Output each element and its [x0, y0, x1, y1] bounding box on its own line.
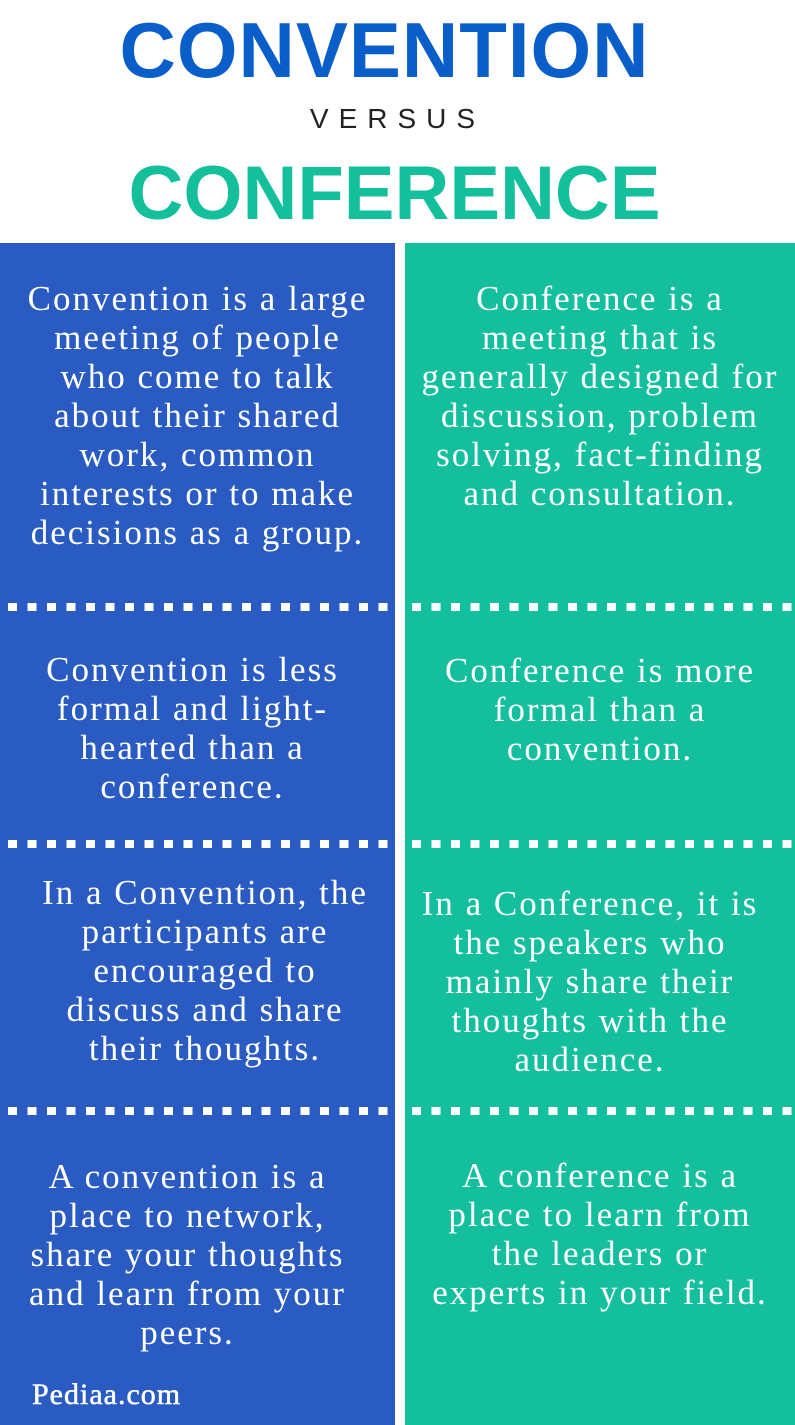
text: convention definition: work, common — [80, 435, 315, 474]
panel: conference column — [405, 243, 795, 1425]
text: convention participants: discuss and share — [66, 990, 344, 1029]
text: conference definition: and consultation. — [463, 474, 737, 513]
text: conference learning — [432, 1156, 768, 1312]
text: convention formality: formal than a — [494, 690, 706, 729]
text: convention participants: their thoughts. — [89, 1029, 321, 1068]
text: conference definition: meeting that is — [482, 318, 718, 357]
text: convention definition — [28, 279, 367, 552]
text: convention definition: Convention is a large — [28, 279, 367, 318]
logo: Pediaa.com: Pediaa.com — [32, 1378, 181, 1411]
text: conference definition: discussion, problem — [441, 396, 759, 435]
text: conference speakers: thoughts with the — [451, 1001, 729, 1040]
text: convention network — [29, 1157, 346, 1352]
text: convention definition: interests or to make — [40, 474, 355, 513]
text: conference learning: experts in your field. — [432, 1273, 768, 1312]
text: convention formality: formal and light- — [57, 689, 328, 728]
text: convention formality: Convention is less — [46, 650, 339, 689]
text: conference speakers — [422, 884, 758, 1079]
text: convention network: place to network, — [50, 1196, 326, 1235]
text: convention definition: meeting of people — [54, 318, 341, 357]
text: convention definition: decisions as a group. — [31, 513, 364, 552]
text: convention network: peers. — [140, 1313, 235, 1352]
title: convention: CONVENTION — [119, 6, 650, 94]
text: conference definition: Conference is a — [476, 279, 724, 318]
text: convention formality — [445, 651, 755, 768]
text: conference speakers: In a Conference, it is — [422, 884, 758, 923]
text: conference speakers: mainly share their — [446, 962, 734, 1001]
title: conference: CONFERENCE — [128, 151, 661, 236]
text: conference definition: generally designed for — [422, 357, 778, 396]
text: convention network: share your thoughts — [30, 1235, 345, 1274]
text: convention participants: encouraged to — [93, 951, 317, 990]
text: convention participants — [42, 873, 368, 1068]
subtitle: versus: VERSUS — [310, 103, 485, 134]
text: conference learning: place to learn from — [448, 1195, 752, 1234]
text: conference speakers: audience. — [514, 1040, 666, 1079]
text: convention definition: about their shared — [54, 396, 341, 435]
text: convention formality: hearted than a — [80, 728, 305, 767]
text: convention definition: who come to talk — [60, 357, 335, 396]
text: convention formality — [46, 650, 339, 806]
text: convention formality: Conference is more — [445, 651, 755, 690]
text: conference learning: A conference is a — [462, 1156, 738, 1195]
text: conference definition: solving, fact-finding — [436, 435, 764, 474]
text: convention formality: conference. — [100, 767, 285, 806]
text: convention participants: participants are — [82, 912, 328, 951]
text: convention formality: convention. — [507, 729, 693, 768]
text: conference definition — [422, 279, 778, 513]
panel: convention column — [0, 243, 395, 1425]
text: convention participants: In a Convention, the — [42, 873, 368, 912]
text: convention network: A convention is a — [48, 1157, 326, 1196]
text: conference learning: the leaders or — [492, 1234, 708, 1273]
text: conference speakers: the speakers who — [453, 923, 727, 962]
text: convention network: and learn from your — [29, 1274, 346, 1313]
